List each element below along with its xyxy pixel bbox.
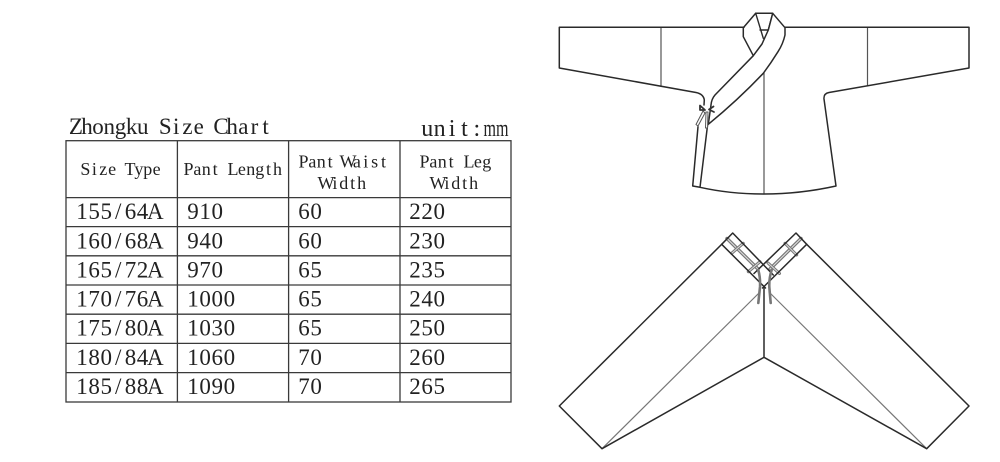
collar back	[756, 13, 773, 38]
table header: Pant Waist	[298, 152, 386, 172]
table rows: 230	[409, 228, 445, 254]
jacket body outline	[559, 27, 969, 194]
table header: Size Type	[80, 159, 161, 179]
table rows: 1030	[187, 316, 235, 340]
table rows: 65	[298, 286, 322, 312]
table rows: 65	[298, 258, 322, 282]
trousers outline	[559, 244, 969, 449]
table rows: 175/80A	[76, 316, 164, 340]
waist tie	[696, 106, 714, 128]
table rows: 1000	[187, 286, 235, 312]
waistband straps	[727, 238, 801, 274]
table rows: 170/76A	[76, 286, 164, 312]
collar band	[708, 13, 785, 124]
table rows: 970	[187, 258, 223, 282]
table rows: 180/84A	[76, 345, 164, 370]
table rows: 240	[409, 286, 445, 312]
unit label: mm	[484, 116, 509, 142]
leg fold lines	[602, 292, 927, 449]
table rows: 65	[298, 316, 322, 340]
unit label: unit:	[421, 116, 480, 142]
jacket seams	[661, 28, 868, 194]
table rows: 940	[187, 228, 223, 254]
table header: Width	[318, 173, 366, 193]
waistband right	[754, 233, 807, 288]
table rows: 70	[298, 345, 322, 370]
table rows: 70	[298, 374, 322, 399]
table rows	[76, 199, 445, 399]
table header: Pant Leg	[420, 152, 491, 172]
table rows: 250	[409, 316, 445, 340]
table rows: 60	[298, 199, 322, 224]
waistband left	[722, 233, 773, 288]
table rows: 60	[298, 228, 322, 254]
table rows: 185/88A	[76, 374, 164, 399]
size table	[66, 141, 511, 402]
table header: Pant Length	[184, 159, 282, 179]
table rows: 1060	[187, 345, 235, 370]
trousers drawing	[559, 233, 969, 449]
table rows: 220	[409, 199, 445, 224]
table rows: 165/72A	[76, 258, 164, 282]
table rows: 910	[187, 199, 223, 224]
table header	[80, 152, 491, 193]
title: Zhongku Size Chart	[69, 114, 269, 139]
collar left lapel	[743, 13, 756, 56]
table rows: 260	[409, 345, 445, 370]
table header: Width	[430, 173, 478, 193]
table rows: 1090	[187, 374, 235, 399]
unit label	[421, 116, 509, 142]
table rows: 155/64A	[76, 199, 164, 224]
table rows: 235	[409, 258, 445, 282]
table rows: 160/68A	[76, 228, 164, 254]
jacket drawing	[559, 13, 969, 194]
table rows: 265	[409, 374, 445, 399]
ties	[758, 270, 772, 303]
